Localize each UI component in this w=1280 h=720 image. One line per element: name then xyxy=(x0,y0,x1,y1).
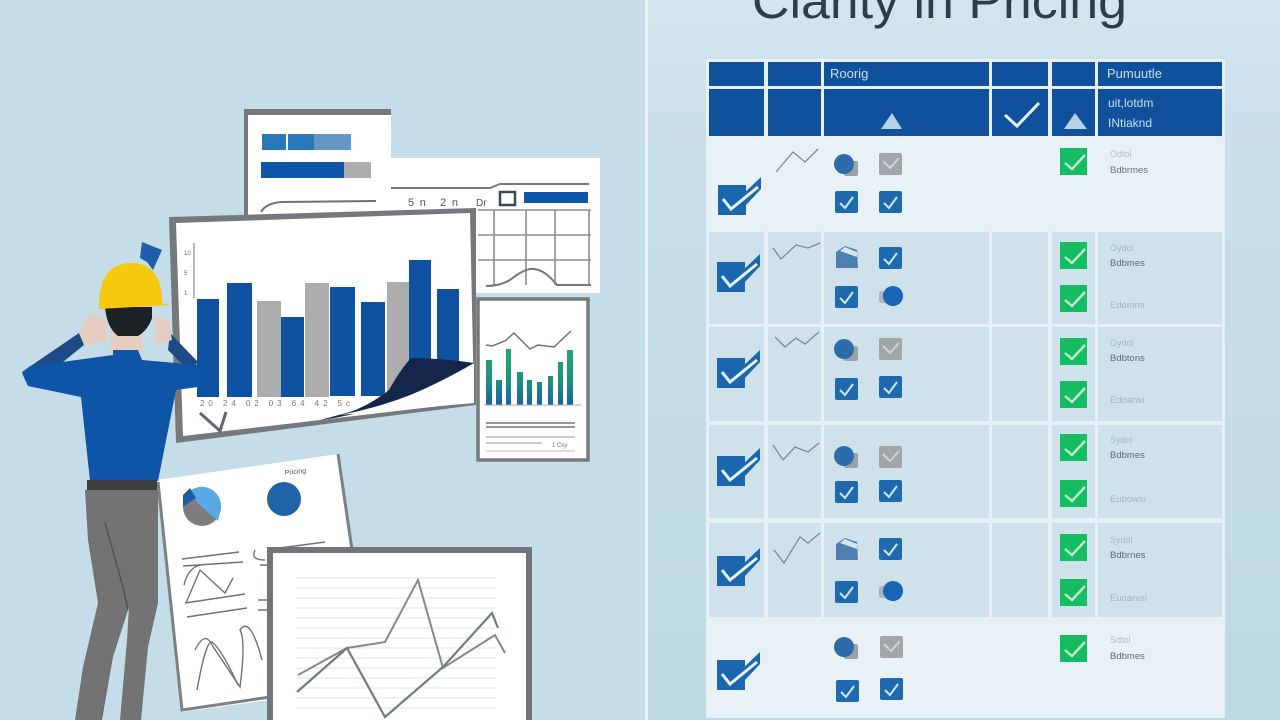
icon: folder xyxy=(836,246,858,268)
sheet with grid chart xyxy=(391,158,600,293)
icon: green check xyxy=(1060,480,1087,507)
header: Roorig: Roorig xyxy=(830,66,868,81)
icon: gray check xyxy=(880,636,903,658)
icon: green check xyxy=(1060,635,1087,662)
icon: green check xyxy=(1060,148,1087,175)
label: Edoansi xyxy=(1110,395,1144,406)
icon: folder xyxy=(836,538,858,560)
icon: dot xyxy=(879,581,903,601)
icon: check xyxy=(717,350,760,388)
label: Bdbrmes xyxy=(1110,165,1148,176)
icon: green check xyxy=(1060,381,1087,408)
hands and neck xyxy=(79,312,172,353)
sparkline xyxy=(773,243,820,259)
icon: green check xyxy=(1060,579,1087,606)
icon: dot xyxy=(879,286,903,306)
label: Bdbtons xyxy=(1110,353,1145,364)
icon: folder xyxy=(834,339,858,361)
header: Pumuutle: Pumuutle xyxy=(1107,66,1162,81)
icon: check xyxy=(717,548,760,586)
y axis: 10 xyxy=(184,251,191,257)
torso xyxy=(22,350,198,481)
icon: blue check xyxy=(879,480,902,502)
label: Bdbmes xyxy=(1110,651,1145,662)
small check mark xyxy=(200,412,226,431)
row 6 xyxy=(709,621,1222,713)
header row 1 xyxy=(709,62,1222,86)
header row 2 xyxy=(709,89,1222,136)
icon: blue check xyxy=(879,376,902,398)
label: Bdbmes xyxy=(1110,258,1145,269)
raised arms xyxy=(22,333,198,380)
sparkline xyxy=(773,443,819,460)
panel: right background xyxy=(648,0,1280,720)
bars xyxy=(197,260,459,397)
icon: blue check xyxy=(880,678,903,700)
icon: check xyxy=(718,177,761,215)
icon: blue check xyxy=(835,581,858,603)
icon: blob xyxy=(834,637,858,659)
sparkline xyxy=(776,149,818,172)
main bar chart with curled corner xyxy=(169,208,476,443)
icon: blue check xyxy=(835,481,858,503)
tilted sheet with pies and lines xyxy=(157,454,353,712)
label: Odtol xyxy=(1110,149,1132,159)
y axis xyxy=(184,243,194,298)
icon: green check xyxy=(1060,534,1087,561)
icon: check xyxy=(717,652,760,690)
y axis: 1 xyxy=(184,291,188,297)
sheet with grid chart: 5n 2n xyxy=(408,197,458,209)
small green bar chart sheet: 1 Cky xyxy=(552,443,567,449)
small green bar chart sheet xyxy=(478,299,588,460)
mini line sketches xyxy=(182,542,325,690)
icon: blue check xyxy=(836,680,859,702)
header: INtiaknd: INtiaknd xyxy=(1108,116,1152,130)
label: Euoarvsi xyxy=(1110,593,1147,604)
icon: blue check xyxy=(835,286,858,308)
illustration: engineer reviewing charts xyxy=(22,109,600,720)
label: Sdtol xyxy=(1110,635,1131,645)
row 3 xyxy=(709,327,1222,421)
icon: gray check xyxy=(879,338,902,360)
icon: triangle xyxy=(881,113,902,129)
label: Sydol xyxy=(1110,435,1133,445)
x axis labels: 20 24 02 03 64 42 5c xyxy=(200,399,350,408)
label: Edoinmi xyxy=(1110,300,1144,311)
label: Oydol xyxy=(1110,338,1134,348)
icon: triangle xyxy=(1064,113,1087,129)
icon: gray check xyxy=(879,446,902,468)
table frame xyxy=(706,59,1225,718)
pricing comparison table xyxy=(706,59,1225,718)
sheet heading: Pricing xyxy=(284,468,307,477)
label: Bdbrnes xyxy=(1110,550,1146,561)
report sheet with progress bars xyxy=(244,109,391,221)
icon: blob xyxy=(834,446,858,468)
row 5 xyxy=(709,523,1222,617)
icon: header check xyxy=(1005,103,1039,126)
icon: gray check xyxy=(879,153,902,175)
large line chart board xyxy=(270,550,529,720)
label: Sydol xyxy=(1110,535,1133,545)
y axis: 5 xyxy=(184,271,188,277)
sparkline xyxy=(775,332,819,347)
icon: green check xyxy=(1060,434,1087,461)
icon: check xyxy=(717,254,760,292)
icon: green check xyxy=(1060,285,1087,312)
icon: blue check xyxy=(879,247,902,269)
row 2 xyxy=(709,232,1222,324)
trousers xyxy=(75,490,158,720)
pie chart dark xyxy=(267,482,301,516)
icon: blue check xyxy=(835,191,858,213)
row 4 xyxy=(709,425,1222,518)
engineer figure xyxy=(22,242,198,720)
panel divider xyxy=(645,0,648,720)
label: Oydol xyxy=(1110,243,1134,253)
icon: green check xyxy=(1060,242,1087,269)
sheet with grid chart: Dr xyxy=(476,198,487,209)
icon: blue check xyxy=(835,378,858,400)
icon: blue check xyxy=(879,191,902,213)
header: uit,lotdm: uit,lotdm xyxy=(1108,96,1153,110)
row 1 xyxy=(709,139,1222,227)
icon: blue check xyxy=(879,538,902,560)
label: Bdbmes xyxy=(1110,450,1145,461)
icon: check xyxy=(717,448,760,486)
pie chart light xyxy=(183,487,221,526)
icon: blob xyxy=(834,154,858,176)
hair xyxy=(105,307,152,336)
curled page corner xyxy=(320,358,474,420)
label: Eubowsi xyxy=(1110,494,1146,505)
hard hat xyxy=(99,242,170,309)
sparkline xyxy=(774,533,820,563)
belt xyxy=(87,480,157,490)
icon: green check xyxy=(1060,338,1087,365)
panel: left background xyxy=(0,0,645,720)
